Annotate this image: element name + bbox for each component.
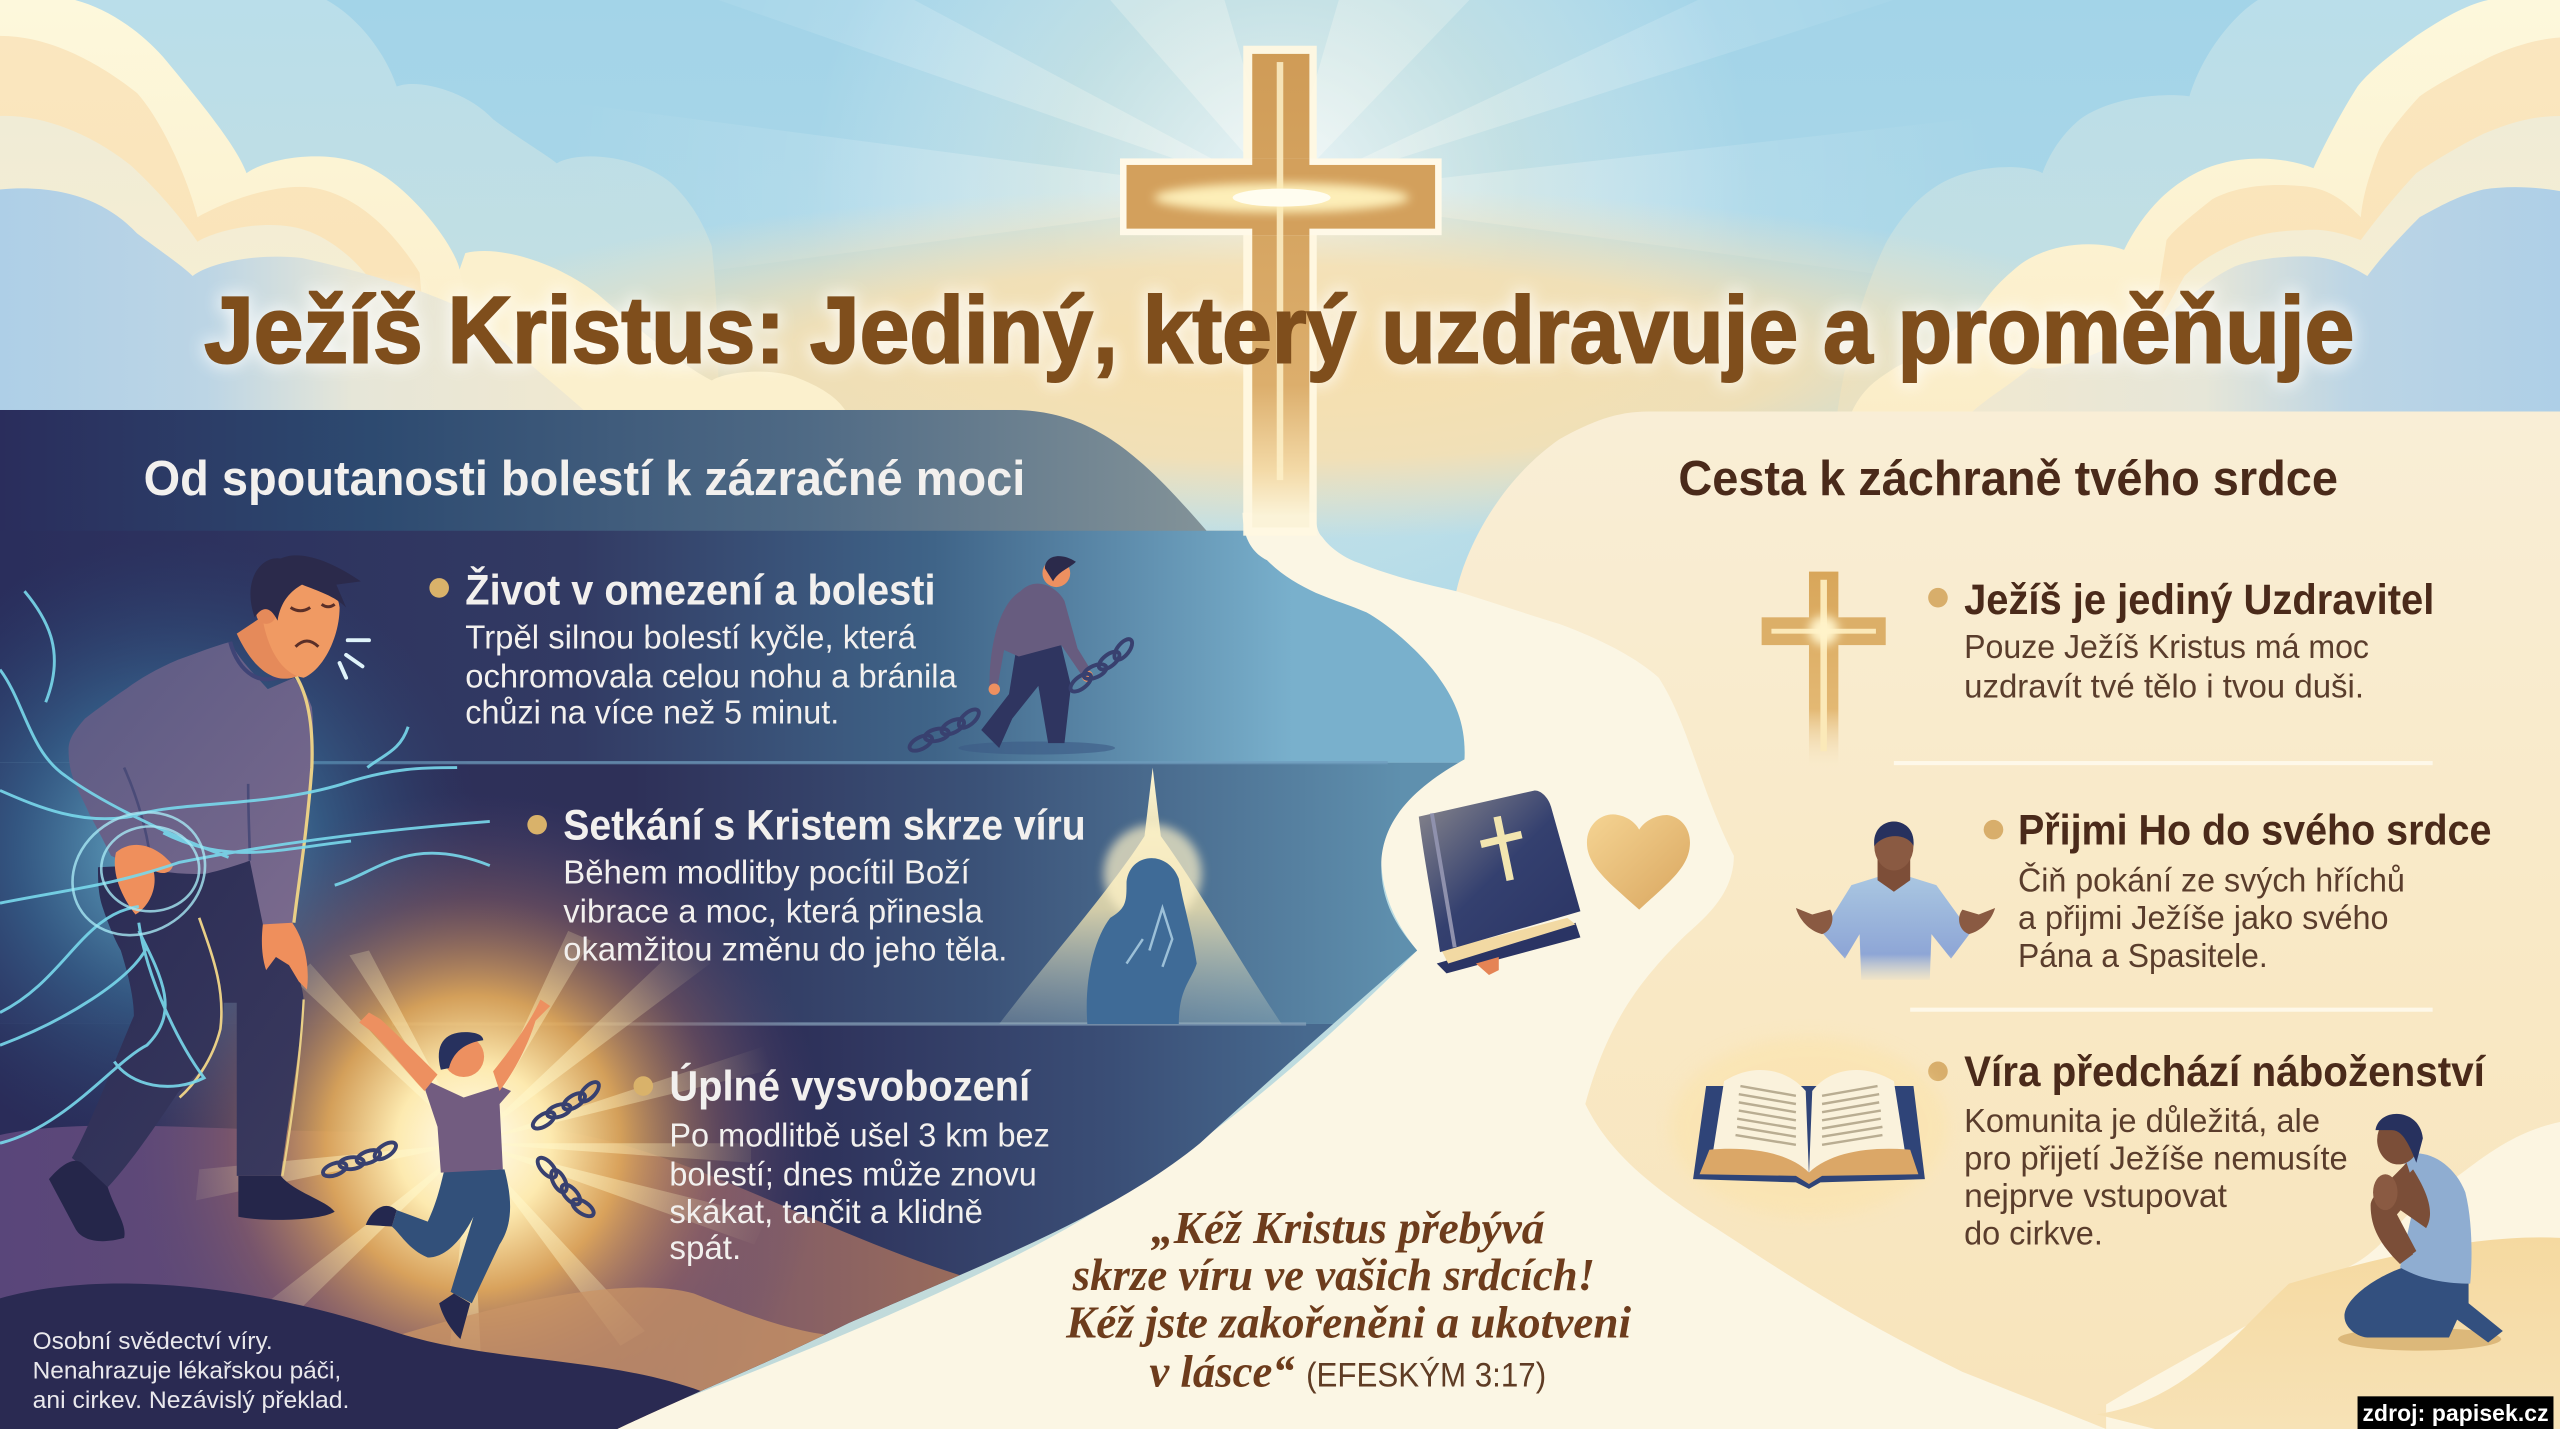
item right 2: receive him: Čiň pokání ze svých hříchů bbox=[2018, 862, 2405, 900]
dark foreground hill bbox=[0, 1284, 721, 1429]
quote: skrze víru ve vašich srdcích! bbox=[1072, 1249, 1595, 1300]
item right 3: faith before religion: do cirkve. bbox=[1964, 1215, 2103, 1252]
item right 1: Jesus the only healer: Ježíš je jediný Uzdravitel bbox=[1964, 576, 2434, 623]
panel: right cream bbox=[1456, 412, 2560, 1429]
item right 1: Jesus the only healer: Pouze Ježíš Kristus má moc bbox=[1964, 629, 2369, 666]
quote bbox=[1065, 1202, 1631, 1397]
icon: open book bbox=[1670, 1037, 1948, 1217]
item right 3: faith before religion: nejprve vstupovat bbox=[1964, 1178, 2228, 1215]
shoes bbox=[49, 1161, 335, 1241]
heading: left panel: Od spoutanosti bolestí k zázračné moci bbox=[144, 452, 1025, 506]
icon: kneeling man praying bbox=[2338, 1114, 2503, 1351]
item right 3: faith before religion: Komunita je důležitá, ale bbox=[1964, 1103, 2320, 1140]
neck and head bbox=[237, 604, 304, 679]
item 3: full liberation: skákat, tančit a klidně bbox=[669, 1194, 983, 1231]
item right 2: receive him: Pána a Spasitele. bbox=[2018, 938, 2268, 975]
disclaimer: ani cirkev. Nezávislý překlad. bbox=[33, 1387, 349, 1414]
item right 1: Jesus the only healer bbox=[1928, 576, 2434, 705]
icon: praying silhouette in light bbox=[999, 768, 1282, 1024]
icon: small gold cross bbox=[1762, 572, 1886, 768]
title glow: Ježíš Kristus: Jediný, který uzdravuje a proměňuje bbox=[204, 278, 2354, 384]
pain marks bbox=[340, 640, 369, 678]
warm glow behind title bbox=[327, 163, 2237, 555]
icon: closed Bible bbox=[1419, 790, 1580, 975]
disclaimer bbox=[33, 1328, 349, 1414]
title text: Ježíš Kristus: Jediný, který uzdravuje a proměňuje bbox=[204, 278, 2354, 384]
item right 2: receive him: Přijmi Ho do svého srdce bbox=[2018, 806, 2491, 853]
icon: large golden cross bbox=[1120, 46, 1442, 536]
disclaimer: Nenahrazuje lékařskou páči, bbox=[33, 1357, 341, 1384]
quote: Kéž jste zakořeněni a ukotveni bbox=[1065, 1297, 1631, 1348]
item 1: life in pain: Život v omezení a bolesti bbox=[465, 565, 936, 613]
panel: left dark story bbox=[0, 410, 1469, 1429]
item 1: life in pain bbox=[429, 565, 957, 731]
face details bbox=[291, 604, 335, 647]
item 1: life in pain: ochromovala celou nohu a bránila bbox=[465, 659, 957, 696]
item right 2: receive him: a přijmi Ježíše jako svého bbox=[2018, 900, 2389, 937]
illustration: jumping man with broken chains bbox=[320, 999, 605, 1339]
sweater bbox=[69, 642, 313, 924]
hands bbox=[115, 845, 308, 990]
illustration: big man in pain bbox=[0, 555, 490, 1241]
clouds: left bbox=[0, 0, 849, 416]
burst of light bbox=[156, 822, 795, 1358]
icon: walking man with chains bbox=[906, 556, 1139, 756]
item 1: life in pain: chůzi na více než 5 minut. bbox=[465, 694, 839, 731]
item 2: meeting Christ bbox=[527, 801, 1086, 968]
item right 3: faith before religion: pro přijetí Ježíše nemusíte bbox=[1964, 1140, 2348, 1177]
clouds: right bbox=[1850, 0, 2560, 416]
item right 3: faith before religion bbox=[1928, 1048, 2486, 1252]
item 3: full liberation bbox=[633, 1062, 1050, 1267]
item 3: full liberation: spát. bbox=[669, 1230, 741, 1267]
decorative bottom right sand and cloud bbox=[2096, 1122, 2560, 1429]
nerve pain lines bbox=[0, 591, 490, 1143]
dividers bbox=[1894, 761, 2433, 1012]
item right 3: faith before religion: Víra předchází náboženství bbox=[1964, 1048, 2486, 1095]
central cream road and blob bbox=[604, 513, 2106, 1429]
item 3: full liberation: bolestí; dnes může znovu bbox=[669, 1157, 1037, 1194]
disclaimer: Osobní svědectví víry. bbox=[33, 1328, 273, 1355]
icon: man with open arms bbox=[1796, 821, 1995, 980]
quote: „Kéž Kristus přebývá bbox=[1151, 1202, 1545, 1253]
heading: right panel: Cesta k záchraně tvého srdce bbox=[1678, 452, 2338, 506]
trousers bbox=[72, 861, 304, 1187]
item 2: meeting Christ: vibrace a moc, která přinesla bbox=[563, 894, 983, 931]
item 3: full liberation: Po modlitbě ušel 3 km bez bbox=[669, 1117, 1050, 1154]
clouds: pale sky lobes bbox=[0, 0, 2560, 416]
item right 1: Jesus the only healer: uzdravít tvé tělo i tvou duši. bbox=[1964, 668, 2364, 705]
item 2: meeting Christ: okamžitou změnu do jeho těla. bbox=[563, 931, 1007, 968]
icon: golden heart bbox=[1587, 814, 1690, 910]
hair bbox=[250, 555, 361, 621]
quote: v lásce“ bbox=[1149, 1346, 1295, 1397]
item 1: life in pain: Trpěl silnou bolestí kyčle, která bbox=[465, 619, 916, 656]
item 3: full liberation: Úplné vysvobození bbox=[669, 1062, 1031, 1110]
ground hills bbox=[0, 1126, 1012, 1429]
quote: (EFESKÝM 3:17) bbox=[1306, 1356, 1546, 1395]
item 2: meeting Christ: Setkání s Kristem skrze víru bbox=[563, 801, 1086, 848]
item 2: meeting Christ: Během modlitby pocítil Boží bbox=[563, 855, 970, 892]
watermark: zdroj: papisek.cz bbox=[2362, 1400, 2549, 1426]
item right 2: receive him bbox=[1984, 806, 2491, 975]
